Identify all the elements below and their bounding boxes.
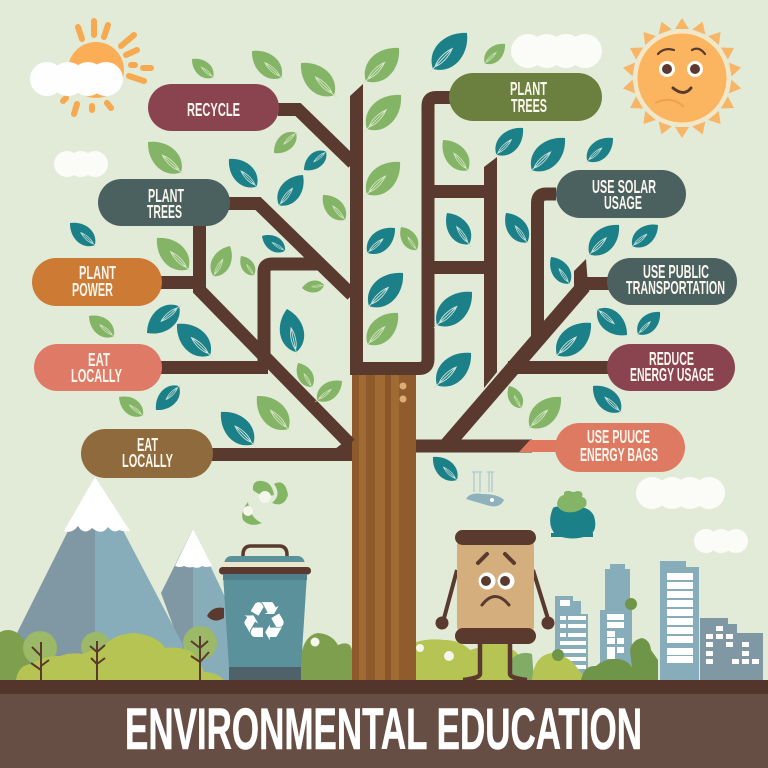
leaf [140, 133, 192, 184]
leaf [301, 279, 327, 294]
leaf [427, 451, 465, 488]
leaf [624, 218, 664, 255]
leaf [498, 207, 537, 251]
leaf [355, 86, 410, 141]
leaf [520, 129, 574, 182]
leaf [425, 344, 480, 397]
leaves: right canopy [395, 24, 666, 488]
leaf [478, 39, 510, 70]
leaf [435, 133, 478, 180]
leaf [579, 217, 627, 265]
leaf [544, 252, 578, 291]
salmon branch connector [519, 440, 560, 452]
leaf [630, 306, 666, 342]
icon: small sun with rays behind cloud [63, 21, 151, 114]
bushes and small trees [0, 626, 352, 694]
leaf [358, 221, 402, 262]
leaf [269, 125, 303, 159]
leaf [149, 230, 199, 280]
leaf [487, 121, 530, 164]
leaves: left canopy [64, 43, 354, 456]
leaf [425, 283, 481, 337]
pill: plant trees right: PLANT [510, 79, 547, 99]
pill: eat locally lower: LOCALLY [122, 451, 173, 471]
city buildings [555, 561, 763, 680]
pill: eat locally upper: EAT [88, 350, 110, 370]
pill: use solar usage [556, 170, 686, 218]
pill: plant power [32, 258, 162, 306]
leaf [222, 152, 266, 196]
leaf [420, 24, 477, 81]
pill: recycle [148, 84, 279, 131]
cloud: top centre [511, 34, 602, 68]
bushes right [416, 638, 658, 680]
leaf [299, 144, 333, 176]
icon: recycling symbol: ♻ [240, 590, 288, 653]
pill: plant power: PLANT [79, 263, 116, 283]
leaf [579, 131, 619, 170]
icon: smiling sun [622, 18, 742, 138]
leaf [503, 383, 528, 413]
leaf [236, 253, 260, 280]
cloud: small lower right [694, 529, 748, 553]
leaf [150, 378, 187, 416]
leaf [395, 223, 424, 256]
pill: use public transportation: USE PUBLIC [643, 262, 709, 282]
leaf [292, 359, 319, 393]
leaf [357, 305, 406, 355]
leaf [586, 379, 630, 421]
pill: eat locally lower [81, 429, 213, 478]
tree branches [160, 84, 612, 454]
pill: use public transportation [607, 258, 737, 305]
leaf [316, 189, 354, 228]
leaf [84, 309, 121, 345]
pill: recycle: RECYCLE [187, 100, 240, 120]
leaf [355, 153, 409, 206]
tree trunk [352, 375, 416, 680]
leaf [292, 54, 346, 107]
pill: reduce energy usage: REDUCE [649, 349, 694, 369]
cloud: lower right [636, 477, 725, 509]
pill: use solar usage: USE SOLAR [592, 177, 656, 197]
pill: use puuce energy bags [555, 423, 685, 472]
ground band [0, 680, 768, 694]
leaf [245, 43, 291, 88]
leaf [64, 216, 103, 254]
leaf [545, 314, 600, 367]
leaf [169, 315, 221, 367]
cloud: left sun cloud [30, 62, 123, 96]
leaf [187, 53, 220, 85]
pill: plant trees left: PLANT [148, 186, 184, 206]
title banner [0, 694, 768, 768]
pill: eat locally upper: LOCALLY [71, 366, 122, 386]
leaf [258, 230, 291, 258]
icon: hanging swing ornament [466, 472, 504, 506]
pill: use solar usage: USAGE [604, 193, 642, 213]
leaf [354, 39, 408, 93]
pill: plant trees left [98, 179, 230, 226]
leaf [212, 403, 265, 456]
leaf [140, 295, 189, 342]
pill: reduce energy usage [607, 344, 735, 391]
leaf [114, 391, 150, 423]
pill: plant power: POWER [72, 280, 113, 300]
pill: eat locally upper [34, 344, 162, 391]
icon: teal frog [550, 491, 595, 538]
cloud: small left [54, 151, 108, 177]
pill: plant trees left: TREES [147, 202, 182, 222]
mountains [17, 477, 232, 680]
pill: use puuce energy bags: ENERGY BAGS [580, 445, 658, 465]
character: sad tree stump [436, 530, 554, 680]
leaf [310, 374, 347, 409]
pill: use puuce energy bags: USE PUUCE [587, 427, 650, 447]
leaf [204, 242, 238, 283]
icon: recycling bin [207, 546, 311, 680]
leaf [439, 207, 479, 253]
pill: plant trees right: TREES [511, 96, 547, 116]
leaf [269, 169, 311, 214]
icon: floating recycling leaves [242, 481, 288, 525]
leaves: centre column [354, 39, 412, 355]
leaf [357, 264, 412, 318]
leaf [519, 389, 569, 438]
leaf [275, 307, 309, 358]
pill: eat locally lower: EAT [137, 435, 158, 455]
leaf [248, 388, 300, 440]
pill: plant trees right [449, 73, 602, 121]
leaf [588, 299, 634, 343]
